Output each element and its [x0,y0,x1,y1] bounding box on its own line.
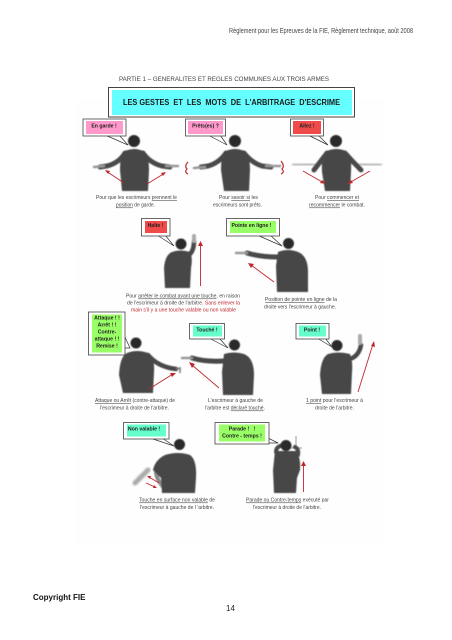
caption: touché [205,398,265,412]
speech bubble: point: Point ! [304,328,320,334]
caption: attaque: Attaque ou Arrêt (contre-attaque) de [95,398,175,404]
caption: pointe en ligne: Position de pointe en ligne de la [265,297,338,303]
caption: en garde: position de garde. [116,202,155,208]
speech bubble: attaque: Attaque ! ! [94,316,120,322]
panel: pointe en ligne [226,218,338,310]
arrow: parade [301,461,306,492]
caption: prêts: escrimeurs sont prêts. [213,202,262,208]
caption: touché: L'escrimeur à gauche de [208,398,263,404]
caption: touché: l'arbitre est déclaré touché. [205,406,265,412]
speech bubble: parade: Parade ! ! [229,426,256,432]
caption: allez [309,195,365,208]
arrows: allez [303,171,370,184]
speech bubble: allez: Allez ! [299,124,315,130]
caption: attaque: l'escrimeur à droite de l'arbitre. [100,406,169,412]
fencer: point [320,336,361,394]
caption: en garde [96,195,177,208]
caption: non valable: l'escrimeur à gauche de l 'arbitre. [140,505,214,511]
speech bubble: attaque: Remise ! [96,344,118,350]
sword [286,436,302,448]
panel: point [296,324,375,412]
panel: prêts [186,119,283,208]
caption: halte: de l'escrimeur à droite de l'arbitre. Sans enlever la [127,300,241,306]
speech bubble: prêts: Prêts(es) ? [192,124,219,130]
title banner: LES GESTES ET LES MOTS DE L'ARBITRAGE D'ESCRIME [123,98,340,107]
panel: non valable [124,422,215,511]
caption: parade [246,498,329,511]
speech bubble: non valable: Non valable ! [128,426,160,432]
footer: copyright: Copyright FIE [33,593,86,602]
caption: point: 1 point pour l'escrimeur à [306,398,364,404]
caption: non valable [139,498,215,511]
caption: halte [126,294,241,314]
panel: touché [182,324,265,412]
caption: en garde: Pour que les escrimeurs prennent le [96,195,177,201]
caption: non valable: Touche en surface non valable de [139,498,215,504]
panel: parade [215,422,329,511]
panel: allez [290,119,380,208]
icons: rotation arrows [186,161,283,174]
speech bubble: parade [215,422,278,444]
fencer: touché [182,340,254,395]
footer: page number: 14 [226,604,235,613]
fencer: parade [273,440,300,493]
fencer: allez [294,135,380,191]
panel: en garde [83,119,178,208]
page background panel [75,100,385,545]
fencer: halte [164,236,194,288]
caption: attaque [95,398,175,412]
fencer: en garde [94,135,178,191]
fencer: attaque [119,338,180,393]
caption: prêts [213,195,262,208]
panel: halte [126,218,241,314]
panel: attaque [88,312,180,412]
speech bubble: parade: Contre - temps ! [222,434,262,440]
caption: allez: recommencer le combat. [309,202,365,208]
arrow: pointe en ligne [248,263,274,282]
caption: pointe en ligne: droite vers l'escrimeur à gauche. [264,304,336,310]
speech bubble: attaque: Arrêt ! ! [98,322,117,328]
arrow: point [358,341,375,392]
caption: halte: main s'il y a une touche valable ou non valable [131,308,236,314]
speech bubble: attaque [88,312,130,355]
speech bubble: en garde: En garde ! [91,124,117,130]
arrows: non valable [146,476,159,488]
caption: parade: l'escrimeur à droite de l'arbitre. [253,505,321,511]
arrow: halte [198,241,203,286]
fencer: pointe en ligne [236,238,308,292]
speech bubble: attaque: Contre- [98,330,116,336]
arrow: attaque [149,373,176,389]
speech bubble: halte: Halte ! [148,223,164,229]
caption: pointe en ligne [264,297,338,310]
fencer: non valable [135,439,196,493]
caption: halte: Pour arrêter le combat avant une touche, en raison [126,294,240,300]
caption: point [306,398,364,412]
caption: point: droite de l'arbitre. [315,406,354,412]
title banner [108,88,354,117]
arrows: en garde [105,170,166,184]
speech bubble: attaque: attaque ! ! [95,336,120,342]
caption: allez: Pour commencer et [315,195,359,201]
caption: prêts: Pour savoir si les [219,195,258,201]
section heading: PARTIE 1 – GENERALITES ET REGLES COMMUNES AUX TROIS ARMES [119,76,329,83]
arrow: touché [189,362,219,388]
caption: parade: Parade ou Contre-temps exécuté par [246,498,329,504]
speech bubble: pointe en ligne: Pointe en ligne ! [231,223,272,229]
fencer: prêts [194,135,280,191]
speech bubble: touché: Touché ! [196,328,218,334]
